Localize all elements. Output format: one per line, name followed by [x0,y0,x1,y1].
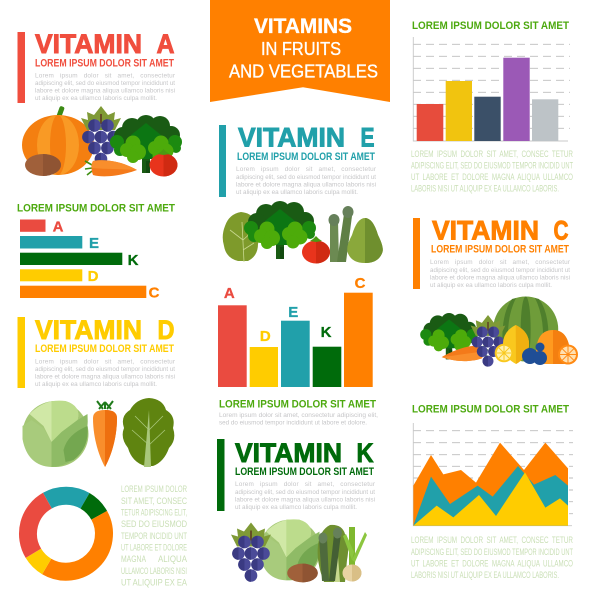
body text: labore et dolore magna aliqua ullamco laboris nisi [236,182,376,188]
body text: ut aliquip ex ea ullamco laboris culpa mollit. [235,504,357,511]
chart caption: Lorem ipsum dolor sit amet, consectetur adipiscing elit, [219,412,378,419]
bar A: A [224,285,235,302]
bar K: K [128,252,139,269]
heading: vitamin A: A [156,29,174,59]
text block beside donut: TEMPOR INCIDID UNT [121,531,187,541]
heading: vitamin E: VITAMIN [238,122,345,152]
bar K [313,324,341,387]
icon: cabbage [260,519,320,580]
accent bar [18,317,25,388]
bar K [20,252,139,269]
icon: leafy green [123,398,174,467]
body text: Lorem ipsum dolor sit amet, consectetur [236,166,377,173]
accent bar [18,32,25,103]
icon: avocado [347,218,383,263]
icon: tomato [150,149,178,176]
icon: broccoli [420,313,478,359]
text block beside donut: TETUR ADIPISCING ELIT, [121,508,187,518]
chart text [411,535,573,580]
chart text [411,149,573,194]
panel: vitamin C [413,216,578,367]
bar C [20,284,160,302]
icon: orange slice [558,344,578,364]
donut chart [28,496,104,572]
icon: onion [342,527,367,582]
chart grid [413,37,570,141]
heading: vitamin D: VITAMIN [35,315,142,345]
icon: potato [25,154,61,176]
text block beside donut: SED DO EIUSMOD [121,519,187,529]
icon: leafy green [318,525,348,582]
body text: adipiscing elit, sed do eiusmod tempor incididunt ut [236,174,376,181]
icon: carrot vertical [93,401,117,467]
body text: labore et dolore magna aliqua ullamco laboris nisi [35,374,175,380]
body text: labore et dolore magna aliqua ullamco laboris nisi [35,88,175,94]
bar E: E [89,235,99,252]
icon: tomato [302,236,330,264]
icon: blueberries [522,342,547,365]
icon: potato [287,564,318,582]
body text: adipiscing elit, sed do eiusmod tempor incididunt ut [235,489,375,496]
panel: horizontal bar chart [17,202,175,302]
body text: Lorem ipsum dolor sit amet, consectetur [35,72,176,80]
title text: IN FRUITS [261,39,341,59]
bar K: K [321,324,332,341]
chart grid [413,423,573,526]
body text: ut aliquip ex ea ullamco laboris culpa mollit. [430,282,552,289]
chart caption [219,398,378,426]
body text [430,259,571,289]
title banner [210,0,390,102]
icon: asparagus [328,206,354,262]
heading: vitamin E: E [360,122,374,152]
bar A [218,285,247,387]
heading: vitamin K: VITAMIN [235,438,342,468]
text block beside donut: UT LABORE ET DOLORE [121,542,187,552]
accent bar [217,439,224,511]
heading: vitamin A: VITAMIN [35,29,142,59]
icon: lemon [503,325,529,364]
chart bars [417,58,558,141]
text block beside donut: UT ALIQUIP EX EA [121,578,188,588]
text block beside donut: MAGNA [121,554,147,564]
accent bar [413,218,420,289]
title text: VITAMINS [254,15,352,38]
icon: grapes [231,522,271,582]
icon: pumpkin [22,106,94,175]
body text [236,166,377,196]
body text [235,481,376,511]
panel: area chart [411,404,573,580]
body text [35,358,176,388]
body text: adipiscing elit, sed do eiusmod tempor incididunt ut [35,366,175,373]
panel: vitamin A [18,29,182,176]
text block beside donut: SIT AMET, CONSEC [121,496,187,506]
body text: ut aliquip ex ea ullamco laboris culpa mollit. [35,95,157,102]
bar A: A [53,218,64,236]
text block beside donut: LOREM IPSUM DOLOR [121,484,187,494]
panel: vitamin D [18,315,176,467]
icon: carrot [441,343,489,366]
subheading: LOREM IPSUM DOLOR SIT AMET [235,466,374,478]
icon: carrot [85,160,137,176]
icon: grapes [81,106,121,165]
chart caption: sed do eiusmod tempor incididunt ut labore et dolore. [219,420,367,426]
heading: vitamin D: D [158,315,174,345]
title text [229,15,378,82]
text block beside donut: ALIQUA [158,554,188,564]
heading: vitamin C: VITAMIN [432,216,539,246]
subheading: LOREM IPSUM DOLOR SIT AMET [237,151,375,163]
bar C [344,275,373,387]
icon: lemon slice [495,344,513,362]
heading: vitamin K: K [356,438,374,468]
icon: orange [536,330,570,364]
bar D [20,268,99,285]
body text: Lorem ipsum dolor sit amet, consectetur [430,259,571,266]
body text: ut aliquip ex ea ullamco laboris culpa mollit. [35,381,157,388]
icon: broccoli [110,115,182,173]
body text: Lorem ipsum dolor sit amet, consectetur [35,358,176,366]
bar E: E [288,304,298,321]
title text: AND VEGETABLES [229,62,378,82]
bar D: D [88,268,99,285]
chart heading: LOREM IPSUM DOLOR SIT AMET [412,404,569,416]
chart heading: LOREM IPSUM DOLOR SIT AMET [17,202,175,214]
body text [35,72,176,102]
icon: watermelon [493,296,558,362]
bar C: C [149,284,160,302]
subheading: LOREM IPSUM DOLOR SIT AMET [35,343,174,355]
bar A [20,218,64,236]
icon: lettuce [223,212,260,262]
bar E [281,304,310,387]
body text: adipiscing elit, sed do eiusmod tempor incididunt ut [35,80,175,87]
area series [413,443,568,526]
heading: vitamin C: C [554,216,568,246]
body text: labore et dolore magna aliqua ullamco laboris nisi [430,274,570,282]
subheading: LOREM IPSUM DOLOR SIT AMET [35,58,174,70]
body text: adipiscing elit, sed do eiusmod tempor incididunt ut [430,267,570,274]
panel: top right bar chart [411,20,573,194]
icon: asparagus [318,528,342,581]
icon: broccoli [244,201,316,259]
bar D [250,328,278,387]
icon: cabbage [22,401,88,467]
chart heading: LOREM IPSUM DOLOR SIT AMET [412,20,569,32]
vertical bar chart [218,275,373,387]
bar E [20,235,99,252]
panel: vitamin K [217,438,376,582]
icon: grapes [471,315,505,367]
body text: labore et dolore magna aliqua ullamco laboris nisi [235,496,375,504]
body text: Lorem ipsum dolor sit amet, consectetur [235,481,376,488]
bar C: C [355,275,366,292]
accent bar [219,125,226,197]
chart caption: LOREM IPSUM DOLOR SIT AMET [219,398,376,410]
text block beside donut: ULLAMCO LABORIS NISI [121,566,187,576]
body text: ut aliquip ex ea ullamco laboris culpa mollit. [236,189,358,196]
text block beside donut [121,484,188,588]
bar D: D [260,328,271,345]
panel: vitamin E [219,122,383,264]
